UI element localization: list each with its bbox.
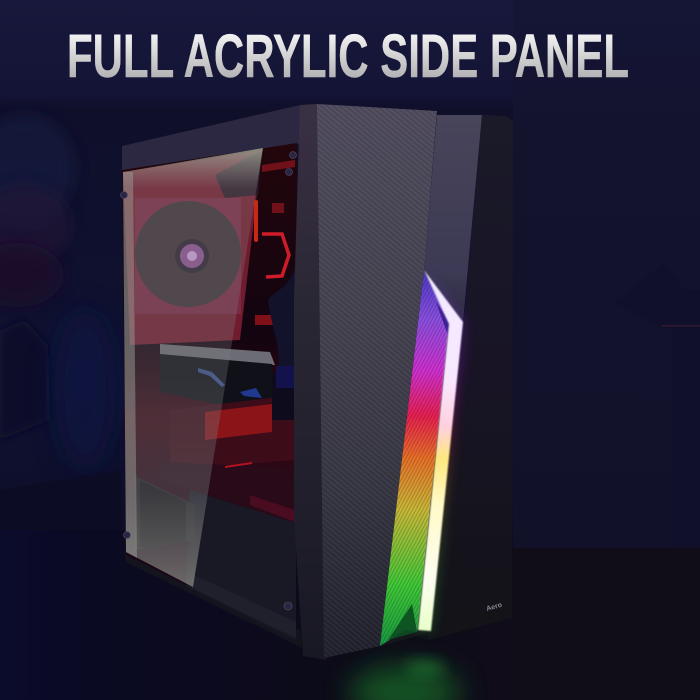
coloured fin (380, 272, 448, 646)
acrylic glass panel (123, 148, 263, 587)
floor grille (160, 462, 295, 523)
shadowed top corner (215, 150, 262, 198)
glass bright edge (123, 172, 137, 558)
fan hub (175, 239, 209, 273)
RGB fin (380, 270, 463, 646)
top panel (122, 105, 300, 172)
right dark front panel (428, 115, 513, 640)
thumb screws (120, 152, 296, 610)
background figure: statue on left (0, 115, 122, 530)
PC case (120, 104, 513, 660)
PSU shroud (135, 476, 190, 550)
top interior bracket (262, 160, 295, 172)
background silhouette: lamp on right (614, 262, 700, 548)
side edge strip (294, 104, 326, 660)
case interior (122, 143, 297, 640)
table surface: left (0, 530, 513, 700)
fan blades (135, 201, 241, 307)
lower red glow bay (170, 398, 294, 465)
green light reflection on table (350, 660, 460, 700)
lower dark panel (186, 490, 296, 640)
red-lit chassis panel (123, 150, 262, 345)
table surface: right (513, 548, 700, 700)
light glow (418, 272, 463, 631)
lower rail detail (192, 574, 296, 638)
dark cable bundle (268, 268, 295, 372)
background wall (0, 0, 700, 548)
bottom rail (125, 552, 302, 648)
logo on front panel: Aero (486, 602, 503, 613)
main front panel (317, 104, 437, 658)
upper right front panel (380, 115, 482, 646)
red ring LED (262, 234, 289, 277)
white light strip (418, 270, 463, 631)
dark fold (436, 302, 450, 338)
interior components (123, 150, 296, 575)
fan frame (135, 198, 241, 314)
graphics card (160, 344, 275, 365)
base notch (388, 604, 417, 640)
